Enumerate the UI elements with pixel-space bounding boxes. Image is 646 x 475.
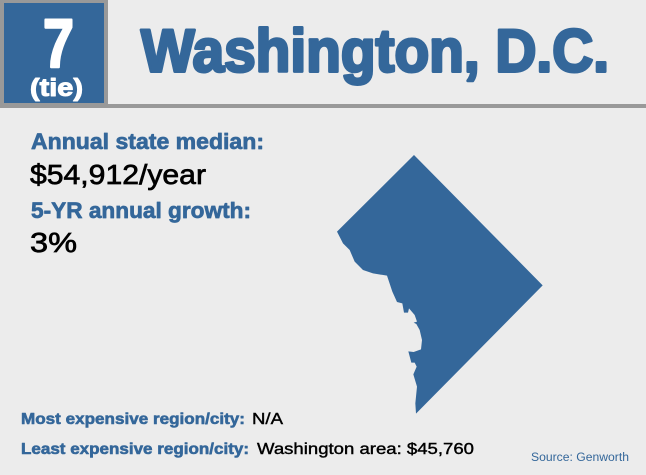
- label: annual state median: Annual state median:: [31, 129, 264, 154]
- rank badge: [0, 0, 108, 108]
- label: least expensive: Least expensive region/city:: [21, 441, 249, 458]
- rank badge: 7: [43, 5, 74, 82]
- header rule: [0, 104, 646, 108]
- map: Washington, D.C.: [337, 155, 543, 414]
- label: five-year growth: 5-YR annual growth:: [31, 198, 251, 223]
- rank badge: (tie): [30, 74, 83, 102]
- label: most expensive region: Most expensive region/city:: [21, 411, 245, 428]
- value: annual median cost: $54,912/year: [30, 159, 206, 190]
- value: least expensive: Washington area: $45,760: [257, 441, 474, 458]
- value: growth: 3%: [30, 227, 77, 258]
- value: most expensive: N/A: [252, 411, 283, 428]
- title: Washington, D.C.: [141, 18, 609, 84]
- source: Source: Genworth: [531, 452, 629, 464]
